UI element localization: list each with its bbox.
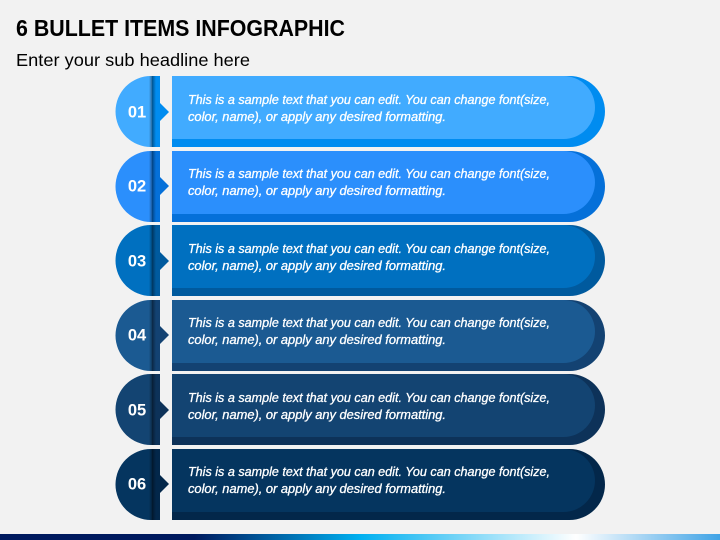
- number badge 04: [115, 300, 169, 371]
- text panel 05: color, name), or apply any desired formatting.: [188, 408, 446, 422]
- number badge 06: [115, 449, 169, 520]
- text panel 06: [172, 449, 605, 520]
- bullet item 02: [115, 151, 605, 222]
- text panel 05: This is a sample text that you can edit. You can change font(size,: [188, 391, 550, 405]
- title: 6 BULLET ITEMS INFOGRAPHIC: [16, 15, 345, 41]
- number badge 06: 06: [128, 476, 146, 494]
- number badge 05: 05: [128, 402, 146, 420]
- text panel 04: [172, 300, 605, 371]
- text panel 02: color, name), or apply any desired formatting.: [188, 184, 446, 198]
- text panel 03: This is a sample text that you can edit. You can change font(size,: [188, 242, 550, 256]
- bullet item 05: [115, 374, 605, 445]
- text panel 05: [172, 374, 605, 445]
- text panel 02: This is a sample text that you can edit. You can change font(size,: [188, 167, 550, 181]
- number badge 04: 04: [128, 326, 147, 344]
- footer gradient bar: [0, 534, 720, 540]
- text panel 01: This is a sample text that you can edit. You can change font(size,: [188, 93, 550, 107]
- bullet item 01: [116, 76, 605, 147]
- bullet item 06: [115, 449, 605, 520]
- text panel 04: This is a sample text that you can edit. You can change font(size,: [188, 316, 550, 330]
- number badge 01: 01: [128, 104, 146, 122]
- text panel 02: [172, 151, 605, 222]
- subtitle: Enter your sub headline here: [16, 50, 250, 70]
- text panel 03: [172, 225, 605, 296]
- bullet item 03: [115, 225, 605, 296]
- number badge 02: 02: [128, 178, 146, 196]
- text panel 01: color, name), or apply any desired formatting.: [188, 110, 446, 124]
- text panel 03: color, name), or apply any desired formatting.: [188, 259, 446, 273]
- number badge 03: 03: [128, 252, 146, 270]
- number badge 05: [115, 374, 169, 445]
- text panel 04: color, name), or apply any desired formatting.: [188, 333, 446, 347]
- bullet item 04: [115, 300, 605, 371]
- number badge 01: [116, 76, 169, 147]
- text panel 06: color, name), or apply any desired formatting.: [188, 482, 446, 496]
- text panel 01: [172, 76, 605, 147]
- number badge 03: [115, 225, 169, 296]
- text panel 06: This is a sample text that you can edit. You can change font(size,: [188, 465, 550, 479]
- number badge 02: [115, 151, 169, 222]
